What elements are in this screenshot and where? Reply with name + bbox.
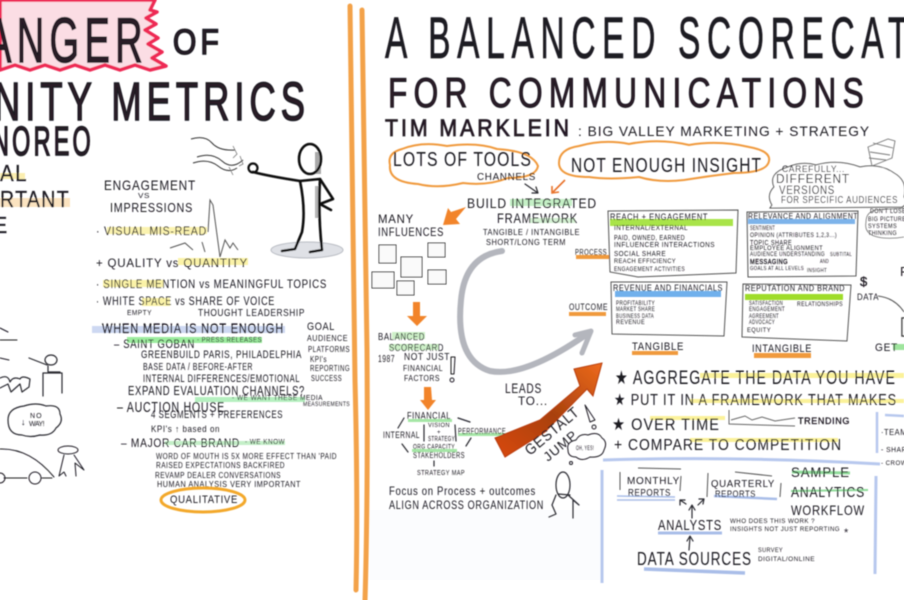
- text: focus and align: [389, 484, 544, 512]
- diagram: strategy map: PERFORMANCE: [458, 427, 506, 436]
- text: goal list: KPI's: [310, 355, 327, 364]
- text: major car brand: WORD OF MOUTH IS 5X MORE EFFECT THAN 'PAID: [156, 452, 337, 461]
- text: major car brand: HUMAN ANALYSIS VERY IMPORTANT: [157, 479, 301, 489]
- panel: sample analytics workflow: [602, 459, 880, 583]
- panel: revenue and financials: MARKET SHARE: [616, 307, 655, 313]
- arrow: to many influences: [443, 207, 466, 225]
- heading: many influences: INFLUENCES: [378, 225, 444, 239]
- diagram: strategy map: ORG CAPACITY: [413, 444, 455, 451]
- heading: many influences: MANY: [378, 212, 414, 226]
- callout: different versions cloud: [769, 162, 904, 208]
- text: auction house: 4 SEGMENTS + PREFERENCES: [151, 409, 283, 421]
- heading: balanced scorecard: SCORECARD: [389, 343, 444, 354]
- callout: different versions cloud: CAREFULLY...: [782, 164, 845, 174]
- icon: stick figure pushing: [248, 144, 343, 258]
- label: process: [575, 248, 609, 259]
- panel: revenue and financials: REVENUE AND FINANCIALS: [613, 283, 723, 293]
- panel: reputation and brand: SATISFACTION: [749, 301, 783, 307]
- text: gestalt jump: GESTALT: [522, 404, 583, 459]
- diagram: strategy map: STRATEGY MAP: [417, 470, 465, 477]
- text: over time: ★ OVER TIME: [612, 415, 720, 434]
- chart: spike sketch: [170, 200, 238, 257]
- panel: balanced scorecard: [372, 6, 904, 583]
- panel: revenue and financials: REVENUE: [616, 320, 645, 326]
- diagram: strategy map: +: [437, 430, 441, 436]
- text: saint goban: – SAINT GOBAN: [114, 337, 195, 351]
- text: goal list: SUCCESS: [311, 374, 342, 383]
- callout: not enough insight: NOT ENOUGH INSIGHT: [571, 155, 762, 177]
- text: compare: + COMPARE TO COMPETITION: [614, 437, 842, 454]
- icon: data dollar: $: [860, 274, 868, 289]
- title: of: OF: [173, 23, 223, 62]
- panel: reputation and brand: AGREEMENT: [749, 314, 779, 320]
- icon: no way thought bubble: [8, 404, 61, 436]
- heading: build integrated framework: FRAMEWORK: [497, 210, 578, 226]
- icon: no way thought bubble: ↓: [21, 417, 26, 427]
- panel: relevance and alignment: AUDIENCE UNDERSTANDING: [750, 252, 825, 258]
- heading: sample analytics workflow: WORKFLOW: [791, 502, 865, 518]
- text: goal list: AUDIENCE: [307, 333, 348, 343]
- panel: reach and engagement: INTERNAL/EXTERNAL: [614, 223, 688, 232]
- subtitle: presenter: TIM MARKLEIN: [385, 115, 572, 142]
- text: survey digital: DIGITAL/ONLINE: [758, 557, 815, 563]
- text: gestalt jump: JUMP: [540, 427, 581, 464]
- panel: reputation and brand: REPUTATION AND BRAND: [745, 283, 845, 293]
- panel: relevance and alignment: INSIGHT: [807, 268, 827, 274]
- callout: lots of tools: LOTS OF TOOLS: [393, 149, 532, 171]
- panel: revenue and financials: [611, 282, 727, 336]
- text: engagement vs impressions: [104, 177, 196, 215]
- text: saint goban: GREENBUILD PARIS, PHILADELPHIA: [141, 349, 302, 361]
- panel: reach and engagement: SOCIAL SHARE: [614, 251, 666, 258]
- heading: build integrated framework: TANGIBLE / INTANGIBLE: [483, 228, 580, 237]
- text: data sources: [637, 549, 752, 573]
- text: survey digital: SURVEY: [758, 548, 783, 554]
- sketch: car and person: [0, 446, 84, 484]
- heading: sample analytics workflow: [791, 464, 868, 518]
- label: get: GET: [875, 342, 898, 354]
- box: quarterly reports: QUARTERLY: [711, 479, 775, 490]
- panel: relevance and alignment: RELEVANCE AND ALIGNMENT: [748, 212, 858, 221]
- text: saint goban: - PRESS RELEASES: [197, 337, 262, 344]
- text: auction house: MEASUREMENTS: [303, 401, 350, 408]
- panel: reach and engagement: [608, 210, 738, 277]
- panel: relevance and alignment: SENTIMENT: [750, 225, 775, 232]
- text: focus and align: Focus on Process + outcomes: [389, 484, 536, 498]
- panel: relevance and alignment: AND: [820, 259, 829, 265]
- dividers: orange columns: [350, 6, 367, 600]
- diagram: strategy map: INTERNAL: [383, 430, 420, 440]
- icon: no way thought bubble: WAY!: [29, 421, 45, 428]
- panel: reach and engagement: ENGAGEMENT ACTIVITIES: [614, 266, 685, 273]
- panel: reputation and brand: ENGAGEMENT: [749, 307, 785, 313]
- text: who does the work: INSIGHTS NOT JUST REPORTING: [730, 527, 840, 533]
- arrow: gray process to outcome: [460, 251, 591, 372]
- panel: danger of vanity metrics: [0, 0, 350, 512]
- heading: many influences: [378, 212, 444, 239]
- title: vanity metrics: NITY METRICS: [0, 72, 310, 132]
- text: goal list: REPORTING: [310, 364, 350, 373]
- text: major car brand: [121, 436, 337, 489]
- heading: balanced scorecard: 1987: [378, 354, 395, 365]
- heading: WHEN MEDIA IS NOT ENOUGH: [102, 320, 284, 336]
- highlights: [92, 326, 305, 445]
- heading: balanced scorecard: [378, 332, 455, 383]
- heading: balanced scorecard: BALANCED: [378, 332, 425, 343]
- text: single mention: · SINGLE MENTION vs MEANINGFUL TOPICS: [96, 279, 327, 291]
- arrow: insight to framework: [552, 180, 565, 193]
- diagram: strategy map: FINANCIAL: [407, 411, 451, 422]
- text: goal list: PLATFORMS: [308, 345, 350, 354]
- heading: balanced scorecard: NOT JUST: [404, 352, 450, 363]
- text: major car brand: RAISED EXPECTATIONS BACKFIRED: [156, 461, 285, 470]
- list: vanity pitfalls: [96, 177, 327, 319]
- panel: reach and engagement: REACH EFFICIENCY: [614, 258, 676, 265]
- heading: sample analytics workflow: SAMPLE: [791, 464, 850, 480]
- panel: revenue and financials: BUSINESS DATA: [616, 314, 654, 320]
- text: who does the work: [730, 519, 849, 539]
- icon: thinking figure: [549, 472, 579, 518]
- text: auction house: - WE WANT THESE MEDIA: [232, 395, 323, 402]
- text: quality vs quantity: + QUALITY vs QUANTITY: [96, 256, 248, 270]
- label: tangible: TANGIBLE: [632, 341, 684, 353]
- text: auction house: – AUCTION HOUSE: [117, 399, 225, 416]
- icon: stacked papers: [868, 139, 895, 166]
- callout: not enough insight: [559, 141, 769, 181]
- icon: no way thought bubble: NO: [30, 413, 42, 420]
- text: auction house: KPI's ↑ based on: [151, 424, 220, 434]
- frame: [602, 459, 880, 583]
- text: thought leadership: THOUGHT LEADERSHIP: [198, 308, 305, 319]
- highlights: [103, 227, 248, 306]
- title: danger burst: [0, 0, 166, 76]
- diagram: strategy map: STRATEGY: [428, 436, 455, 443]
- subtitle: company: : BIG VALLEY MARKETING + STRATEGY: [578, 123, 870, 139]
- callout: different versions cloud: DIFFERENT: [776, 171, 850, 186]
- box: monthly reports: MONTHLY: [627, 476, 680, 487]
- panel: upper right notes: [877, 412, 904, 467]
- panel: relevance and alignment: GOALS AT ALL LEVELS: [750, 266, 804, 272]
- box: quarterly reports: [707, 472, 781, 499]
- panel: revenue and financials: PROFITABILITY: [616, 301, 655, 307]
- icons: influence documents: [372, 243, 446, 295]
- arrows: analysts to reports: [680, 499, 704, 518]
- panel: reach and engagement: REACH + ENGAGEMENT: [610, 212, 708, 222]
- box: quarterly reports: REPORTS: [715, 489, 756, 499]
- text: visual mis-read: · VISUAL MIS-READ: [96, 224, 207, 238]
- heading: balanced scorecard: FACTORS: [404, 374, 440, 383]
- text: white space: · WHITE SPACE vs SHARE OF VOICE: [96, 294, 275, 308]
- label: outcome: OUTCOME: [569, 302, 608, 312]
- callout: qualitative: QUALITATIVE: [170, 494, 238, 506]
- panel: relevance and alignment: [747, 211, 858, 277]
- heading: build integrated framework: SHORT/LONG TERM: [486, 238, 566, 247]
- text: goal list: [307, 321, 350, 383]
- sketch: presenter at podium: [0, 328, 62, 396]
- text: trending: TRENDING: [798, 416, 850, 426]
- label: process: PROCESS: [575, 248, 607, 257]
- text: major car brand: – MAJOR CAR BRAND: [121, 436, 240, 450]
- callout: big picture: THINKING: [868, 230, 897, 237]
- icon: squiggles: [191, 138, 243, 175]
- text: empty: EMPTY: [127, 310, 152, 317]
- text: data sources: DATA SOURCES: [637, 549, 752, 569]
- panel: relevance and alignment: MESSAGING: [750, 259, 788, 266]
- heading: sample analytics workflow: ANALYTICS: [791, 484, 865, 501]
- text: who does the work: WHO DOES THIS WORK ?: [730, 519, 815, 525]
- panel: reach and engagement: INFLUENCER INTERACTIONS: [614, 240, 715, 249]
- text: who does the work: *: [844, 527, 849, 539]
- diagram: strategy map: VISION: [428, 423, 450, 429]
- highlight: important second line: [0, 198, 70, 207]
- callout: big picture: [866, 208, 904, 238]
- icon: data dollar: DATA: [857, 292, 879, 302]
- text: engagement vs impressions: VS: [138, 193, 150, 200]
- icon: data dollar: [857, 264, 904, 336]
- diagram: strategy map: [383, 411, 506, 477]
- arrow: influences to scorecard: [407, 302, 427, 326]
- text: engagement vs impressions: IMPRESSIONS: [110, 201, 193, 215]
- arrow: channels to framework: [525, 184, 538, 193]
- diagram: strategy map: STAKEHOLDERS: [413, 451, 465, 460]
- box: monthly reports: [617, 468, 681, 500]
- callout: lots of tools: [390, 144, 538, 186]
- text: goal list: GOAL: [307, 321, 335, 333]
- text: auction house: [117, 395, 350, 434]
- text: leads to: [505, 380, 548, 408]
- panel: reach and engagement: PAID, OWNED, EARNED: [614, 235, 685, 242]
- callout: different versions cloud: VERSIONS: [779, 183, 835, 197]
- section: when media is not enough: [92, 320, 350, 512]
- heading: build integrated framework: BUILD INTEGRATED: [467, 195, 597, 211]
- text: saint goban: INTERNAL DIFFERENCES/EMOTIONAL: [143, 373, 300, 385]
- text: saint goban: BASE DATA / BEFORE-AFTER: [143, 362, 253, 373]
- text: analysts: ANALYSTS: [658, 517, 722, 534]
- highlights: [650, 373, 904, 442]
- panel: reputation and brand: EQUITY: [747, 327, 771, 334]
- text: survey digital: [758, 548, 815, 563]
- text: focus and align: ALIGN ACROSS ORGANIZATION: [389, 498, 544, 512]
- text: leads to: TO...: [518, 394, 548, 408]
- chart: trend sparkline: [729, 410, 795, 426]
- callout: big picture: SYSTEMS: [868, 223, 897, 230]
- label: intangible: [752, 343, 812, 358]
- arrow: scorecard to strategy map: [420, 387, 436, 410]
- label: outcome: [569, 302, 608, 316]
- panel: relevance and alignment: TOPIC SHARE: [750, 240, 792, 247]
- icon: thought cloud: OH, YES!: [576, 446, 594, 452]
- text: al: AL: [0, 160, 28, 186]
- label: intangible: INTANGIBLE: [752, 343, 812, 355]
- text: rtant: RTANT: [0, 186, 70, 212]
- panel: reputation and brand: RELATIONSHIPS: [797, 302, 843, 308]
- list: key actions: [612, 368, 904, 454]
- callout: lots of tools: CHANNELS: [477, 172, 536, 183]
- arrow: big orange gestalt arrow: [495, 363, 602, 457]
- highlight: important: [0, 173, 25, 179]
- arrow: sources to analysts: [687, 536, 693, 550]
- text: major car brand: - WE KNOW: [245, 439, 285, 446]
- callout: qualitative: [161, 488, 245, 512]
- panel: relevance and alignment: EMPLOYEE ALIGNMENT: [750, 245, 823, 252]
- text: major car brand: REVAMP DEALER CONVERSATIONS: [155, 471, 281, 480]
- panel: reputation and brand: [742, 283, 851, 341]
- text: engagement vs impressions: ENGAGEMENT: [104, 177, 196, 193]
- heading: build integrated framework: [467, 195, 597, 247]
- panel: relevance and alignment: SUBTITAL: [830, 252, 852, 258]
- heading: balanced scorecard: FINANCIAL: [403, 364, 443, 373]
- box: monthly reports: REPORTS: [628, 488, 671, 499]
- icon: thought cloud: [568, 434, 606, 464]
- panel: relevance and alignment: OPINION (ATTRIBUTES 1,2,3...): [750, 232, 837, 239]
- panel: reputation and brand: ADVOCACY: [749, 320, 775, 326]
- text: leads to: LEADS: [505, 380, 542, 396]
- text: saint goban: [114, 337, 305, 398]
- text: saint goban: EXPAND EVALUATION CHANNELS?: [128, 383, 305, 398]
